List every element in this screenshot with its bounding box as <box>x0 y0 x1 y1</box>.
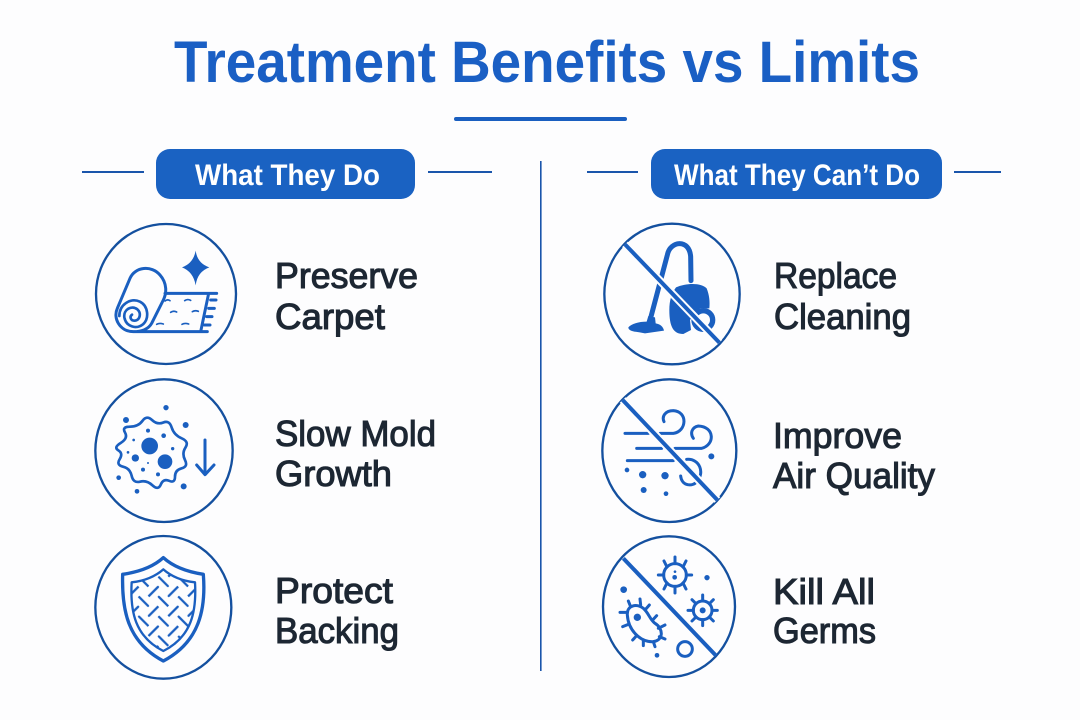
label: slow mold growth: Slow Mold <box>275 413 436 454</box>
label: preserve carpet: Preserve <box>275 255 418 296</box>
center divider <box>540 161 542 671</box>
panel: what they do <box>82 149 492 679</box>
label: kill all germs: Kill All <box>773 571 875 612</box>
heading: what they do <box>82 149 492 199</box>
title: Treatment Benefits vs Limits <box>174 30 920 95</box>
icon: no germs <box>603 536 735 677</box>
label: replace cleaning: Cleaning <box>774 296 911 337</box>
label: kill all germs <box>773 571 876 651</box>
label: improve air quality: Improve <box>773 415 902 456</box>
icon: woven shield <box>95 536 231 679</box>
panel: what they can't do <box>587 149 1001 677</box>
icon: carpet roll with sparkle <box>96 224 236 364</box>
label: replace cleaning <box>774 255 911 337</box>
label: replace cleaning: Replace <box>774 255 897 296</box>
label: slow mold growth <box>275 413 436 494</box>
label: preserve carpet <box>275 255 418 337</box>
title underline <box>454 117 627 121</box>
label: improve air quality: Air Quality <box>773 455 936 496</box>
heading: what they do: What They Do <box>195 159 380 192</box>
label: protect backing: Backing <box>275 610 399 651</box>
label: protect backing <box>275 570 399 651</box>
label: slow mold growth: Growth <box>275 453 392 494</box>
icon: no vacuum <box>604 224 740 364</box>
icon: mold with down arrow <box>95 379 233 522</box>
label: preserve carpet: Carpet <box>275 296 385 337</box>
label: improve air quality <box>773 415 936 496</box>
heading: what they can't do: What They Can’t Do <box>674 159 920 192</box>
label: kill all germs: Germs <box>773 610 876 651</box>
icon: no air quality <box>602 379 736 522</box>
heading: what they can't do <box>587 149 1001 199</box>
label: protect backing: Protect <box>275 570 393 611</box>
